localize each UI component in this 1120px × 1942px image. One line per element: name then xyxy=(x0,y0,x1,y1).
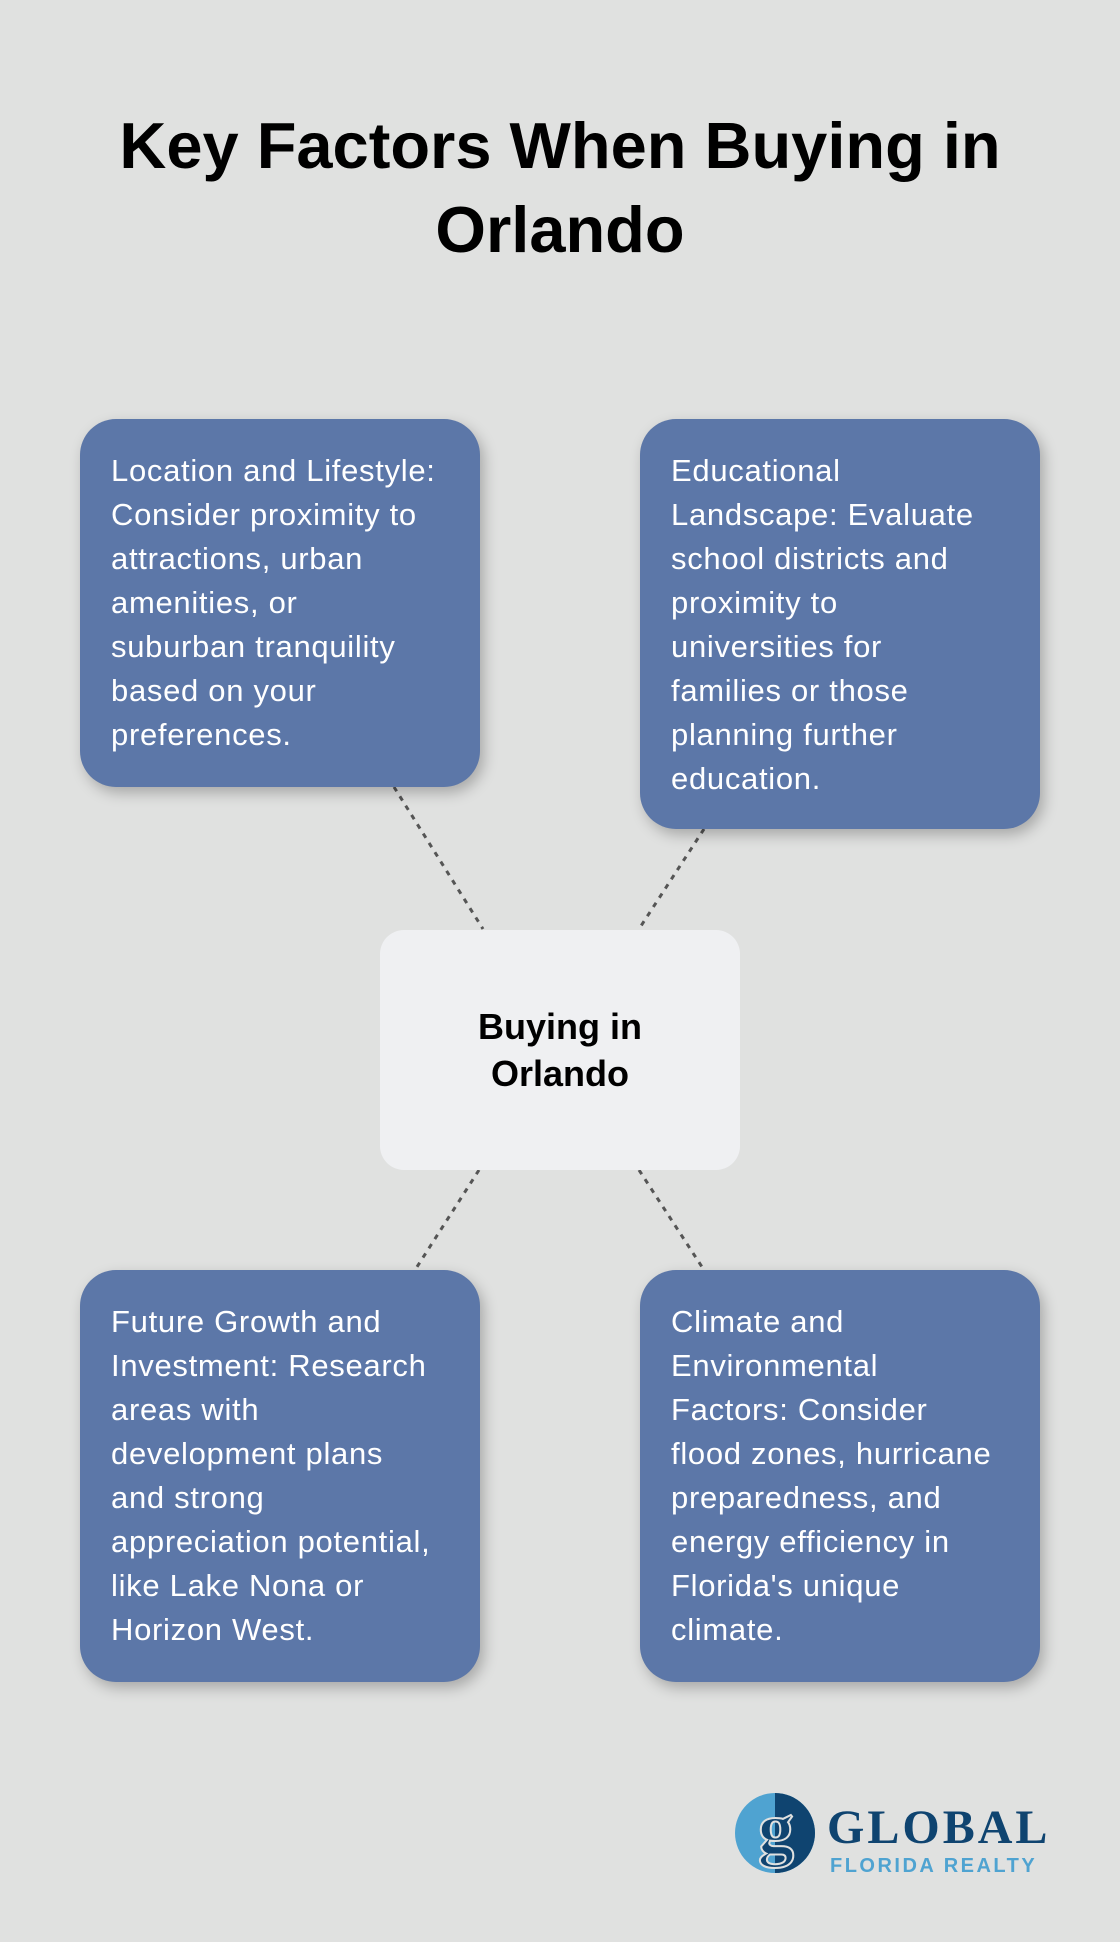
title: Orlando xyxy=(435,193,685,266)
panel: climate xyxy=(640,1270,1040,1682)
panel: location and lifestyle: based on your xyxy=(111,673,317,708)
panel: educational landscape: Landscape: Evaluate xyxy=(671,497,974,532)
panel: educational landscape: education. xyxy=(671,761,821,796)
panel: location and lifestyle: suburban tranquility xyxy=(111,629,396,664)
panel: future growth: Horizon West. xyxy=(111,1612,314,1647)
icon: g circle: g xyxy=(758,1790,794,1868)
panel: climate: energy efficiency in xyxy=(671,1524,950,1559)
title xyxy=(119,109,1001,266)
panel: educational landscape: families or those xyxy=(671,673,909,708)
panel: location and lifestyle: amenities, or xyxy=(111,585,298,620)
panel: climate: flood zones, hurricane xyxy=(671,1436,991,1471)
panel: educational landscape: school districts and xyxy=(671,541,949,576)
logo: FLORIDA REALTY xyxy=(830,1855,1037,1877)
icon: g circle xyxy=(735,1790,815,1873)
panel: future growth: development plans xyxy=(111,1436,383,1471)
panel: future growth: appreciation potential, xyxy=(111,1524,430,1559)
logo xyxy=(735,1790,1050,1877)
panel: educational landscape: universities for xyxy=(671,629,882,664)
panel: educational landscape: planning further xyxy=(671,717,898,752)
panel: future growth: Future Growth and xyxy=(111,1304,381,1339)
panel: future growth xyxy=(80,1270,480,1682)
title: Key Factors When Buying in xyxy=(119,109,1001,182)
panel: climate: Florida's unique xyxy=(671,1568,900,1603)
panel: climate: Factors: Consider xyxy=(671,1392,928,1427)
logo text: GLOBAL xyxy=(827,1801,1050,1854)
panel: future growth: like Lake Nona or xyxy=(111,1568,364,1603)
center node: Buying in xyxy=(478,1006,642,1047)
panel: future growth: Investment: Research xyxy=(111,1348,427,1383)
panel: future growth: and strong xyxy=(111,1480,264,1515)
panel: location and lifestyle: Location and Lifestyle: xyxy=(111,453,436,488)
center node xyxy=(380,930,740,1170)
panel: educational landscape: proximity to xyxy=(671,585,838,620)
panel: location and lifestyle: attractions, urban xyxy=(111,541,363,576)
panel: future growth: areas with xyxy=(111,1392,259,1427)
panel: location and lifestyle: preferences. xyxy=(111,717,292,752)
center node: Orlando xyxy=(491,1053,629,1094)
panel: educational landscape: Educational xyxy=(671,453,841,488)
panel: location and lifestyle: Consider proximity to xyxy=(111,497,417,532)
panel: climate: preparedness, and xyxy=(671,1480,941,1515)
panel: location and lifestyle xyxy=(80,419,480,787)
panel: climate: Environmental xyxy=(671,1348,878,1383)
panel: climate: climate. xyxy=(671,1612,783,1647)
panel: educational landscape xyxy=(640,419,1040,829)
panel: climate: Climate and xyxy=(671,1304,844,1339)
